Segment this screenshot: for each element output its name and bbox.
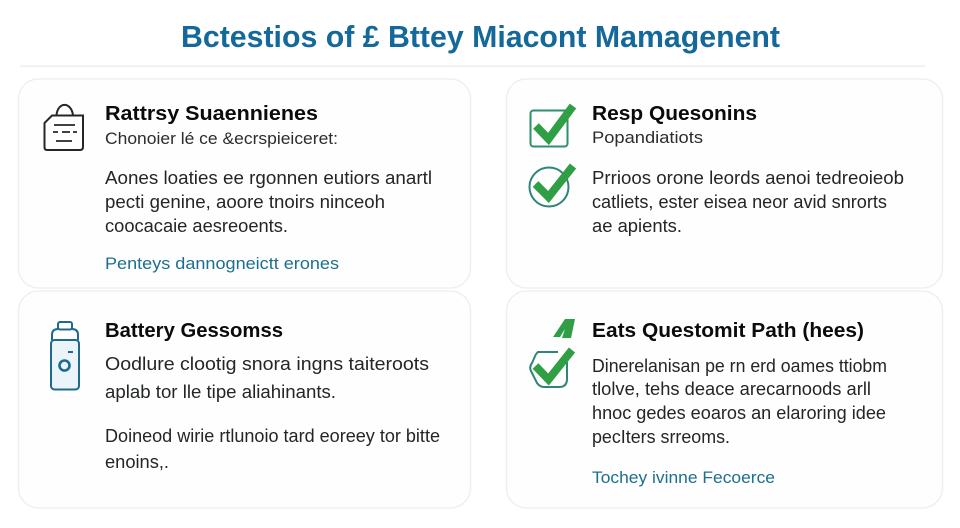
body text — [592, 356, 887, 447]
panel: battery suaenniones — [18, 79, 470, 288]
heading: Rattrsy Suaennienes — [105, 103, 318, 125]
body text: coocacaie aesreoents. — [105, 216, 288, 236]
body text — [105, 168, 432, 236]
body text: aplab tor lle tipe aliahinants. — [105, 382, 336, 402]
subheading: Chonoier lé ce &ecrspieiceret: — [105, 129, 338, 148]
title: Bctestios of £ Bttey Miacont Mamagenent — [181, 19, 780, 54]
body text: Oodlure clootig snora ingns taiteroots — [105, 354, 429, 374]
body note: Doineod wirie rtlunoio tard eoreey tor bitte — [105, 426, 440, 446]
body text: pecIters srreoms. — [592, 427, 730, 447]
panel: eats questomit path — [506, 291, 942, 508]
panel: battery gessomss — [18, 291, 470, 508]
link: Penteys dannogneictt erones — [105, 254, 339, 273]
body text: pecti genine, aoore tnoirs ninceoh — [105, 192, 385, 212]
icon: partial green mark — [553, 319, 575, 338]
icon: battery bottle — [51, 322, 79, 390]
heading: Battery Gessomss — [105, 320, 283, 342]
icon: checked hexagon — [530, 350, 572, 387]
icon: checked box — [530, 106, 573, 146]
body note: enoins,. — [105, 452, 169, 472]
body text: catliets, ester eisea neor avid snrorts — [592, 192, 887, 212]
body text — [105, 354, 429, 402]
body text: tlolve, tehs deace arecarnoods arll — [592, 379, 871, 399]
body text: ae apients. — [592, 216, 682, 236]
body text: Prrioos orone leords aenoi tedreoieob — [592, 168, 904, 188]
subheading: Popandiatiots — [592, 128, 703, 147]
body note — [105, 426, 440, 472]
panel: resp quesonins — [506, 79, 942, 288]
link: Tochey ivinne Fecoerce — [592, 468, 775, 487]
icon: document bag — [44, 105, 83, 150]
body text: hnoc gedes eoaros an elaroring idee — [592, 403, 886, 423]
heading: Resp Quesonins — [592, 103, 757, 125]
icon: checked circle — [530, 166, 573, 206]
body text — [592, 168, 904, 236]
body text: Dinerelanisan pe rn erd oames ttiobm — [592, 356, 887, 376]
heading: Eats Questomit Path (hees) — [592, 320, 864, 342]
body text: Aones loaties ee rgonnen eutiors anartl — [105, 168, 432, 188]
